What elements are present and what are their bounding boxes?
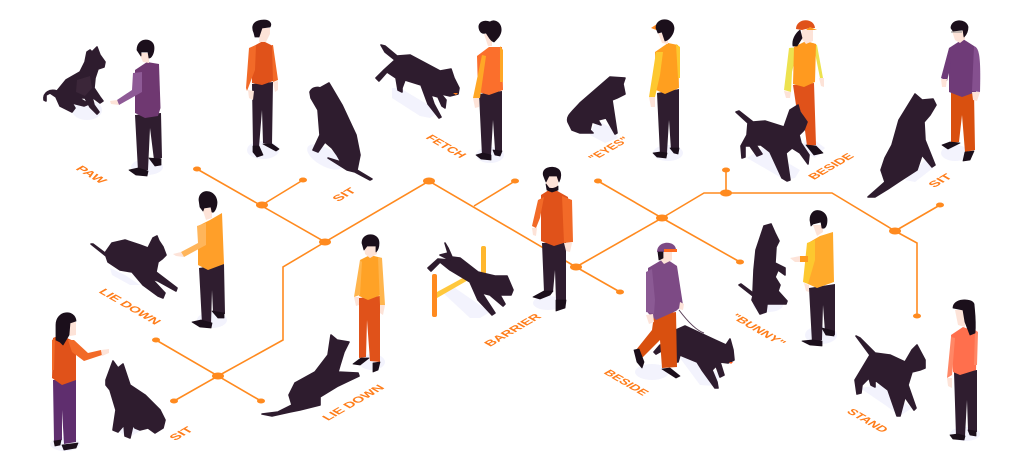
dog: beside top (736, 105, 809, 181)
label: FETCH: FETCH (422, 133, 468, 160)
barrier with jumping dog (428, 243, 513, 318)
dog: eyes (568, 77, 625, 143)
person: sit handler top (246, 20, 279, 159)
dog: sit top (303, 83, 372, 180)
label: "EYES": "EYES" (586, 135, 633, 163)
person: stand handler (947, 300, 980, 441)
dog: bunny (739, 224, 787, 314)
dog: sit right (868, 94, 936, 197)
label: BARRIER: BARRIER (482, 312, 545, 349)
label: SIT top: SIT (330, 186, 360, 204)
person: eyes handler (649, 20, 683, 161)
dog: beside bottom (654, 326, 734, 388)
person: lie down handler left (173, 192, 227, 328)
dog: lie down left (91, 236, 177, 298)
person: sit handler bottom woman (50, 313, 109, 451)
label: SIT right: SIT (926, 172, 956, 190)
dog: sit bottom (106, 361, 165, 438)
label: BESIDE bottom: BESIDE (600, 368, 651, 398)
dog: stand (855, 336, 925, 416)
label: SIT bottom: SIT (167, 425, 197, 443)
person: bunny handler (790, 211, 837, 346)
label: LIE DOWN right: LIE DOWN (320, 383, 388, 423)
dog: paw (44, 47, 105, 120)
person: sit handler right (941, 21, 980, 161)
dog: lie down right (262, 335, 359, 416)
label: BESIDE top: BESIDE (806, 152, 858, 182)
label: LIE DOWN left: LIE DOWN (95, 287, 163, 327)
label: PAW: PAW (72, 164, 109, 186)
person: beside top woman (784, 20, 825, 158)
flowchart network lines (152, 166, 944, 404)
person: paw handler (110, 40, 163, 176)
label: "BUNNY": "BUNNY" (727, 312, 788, 348)
person: lie down handler right (353, 235, 385, 372)
person: beside bottom handler (634, 243, 704, 380)
dog: fetch (376, 45, 459, 118)
label: STAND: STAND (843, 407, 890, 435)
person: fetch handler (473, 21, 504, 163)
person: barrier handler (532, 167, 573, 311)
